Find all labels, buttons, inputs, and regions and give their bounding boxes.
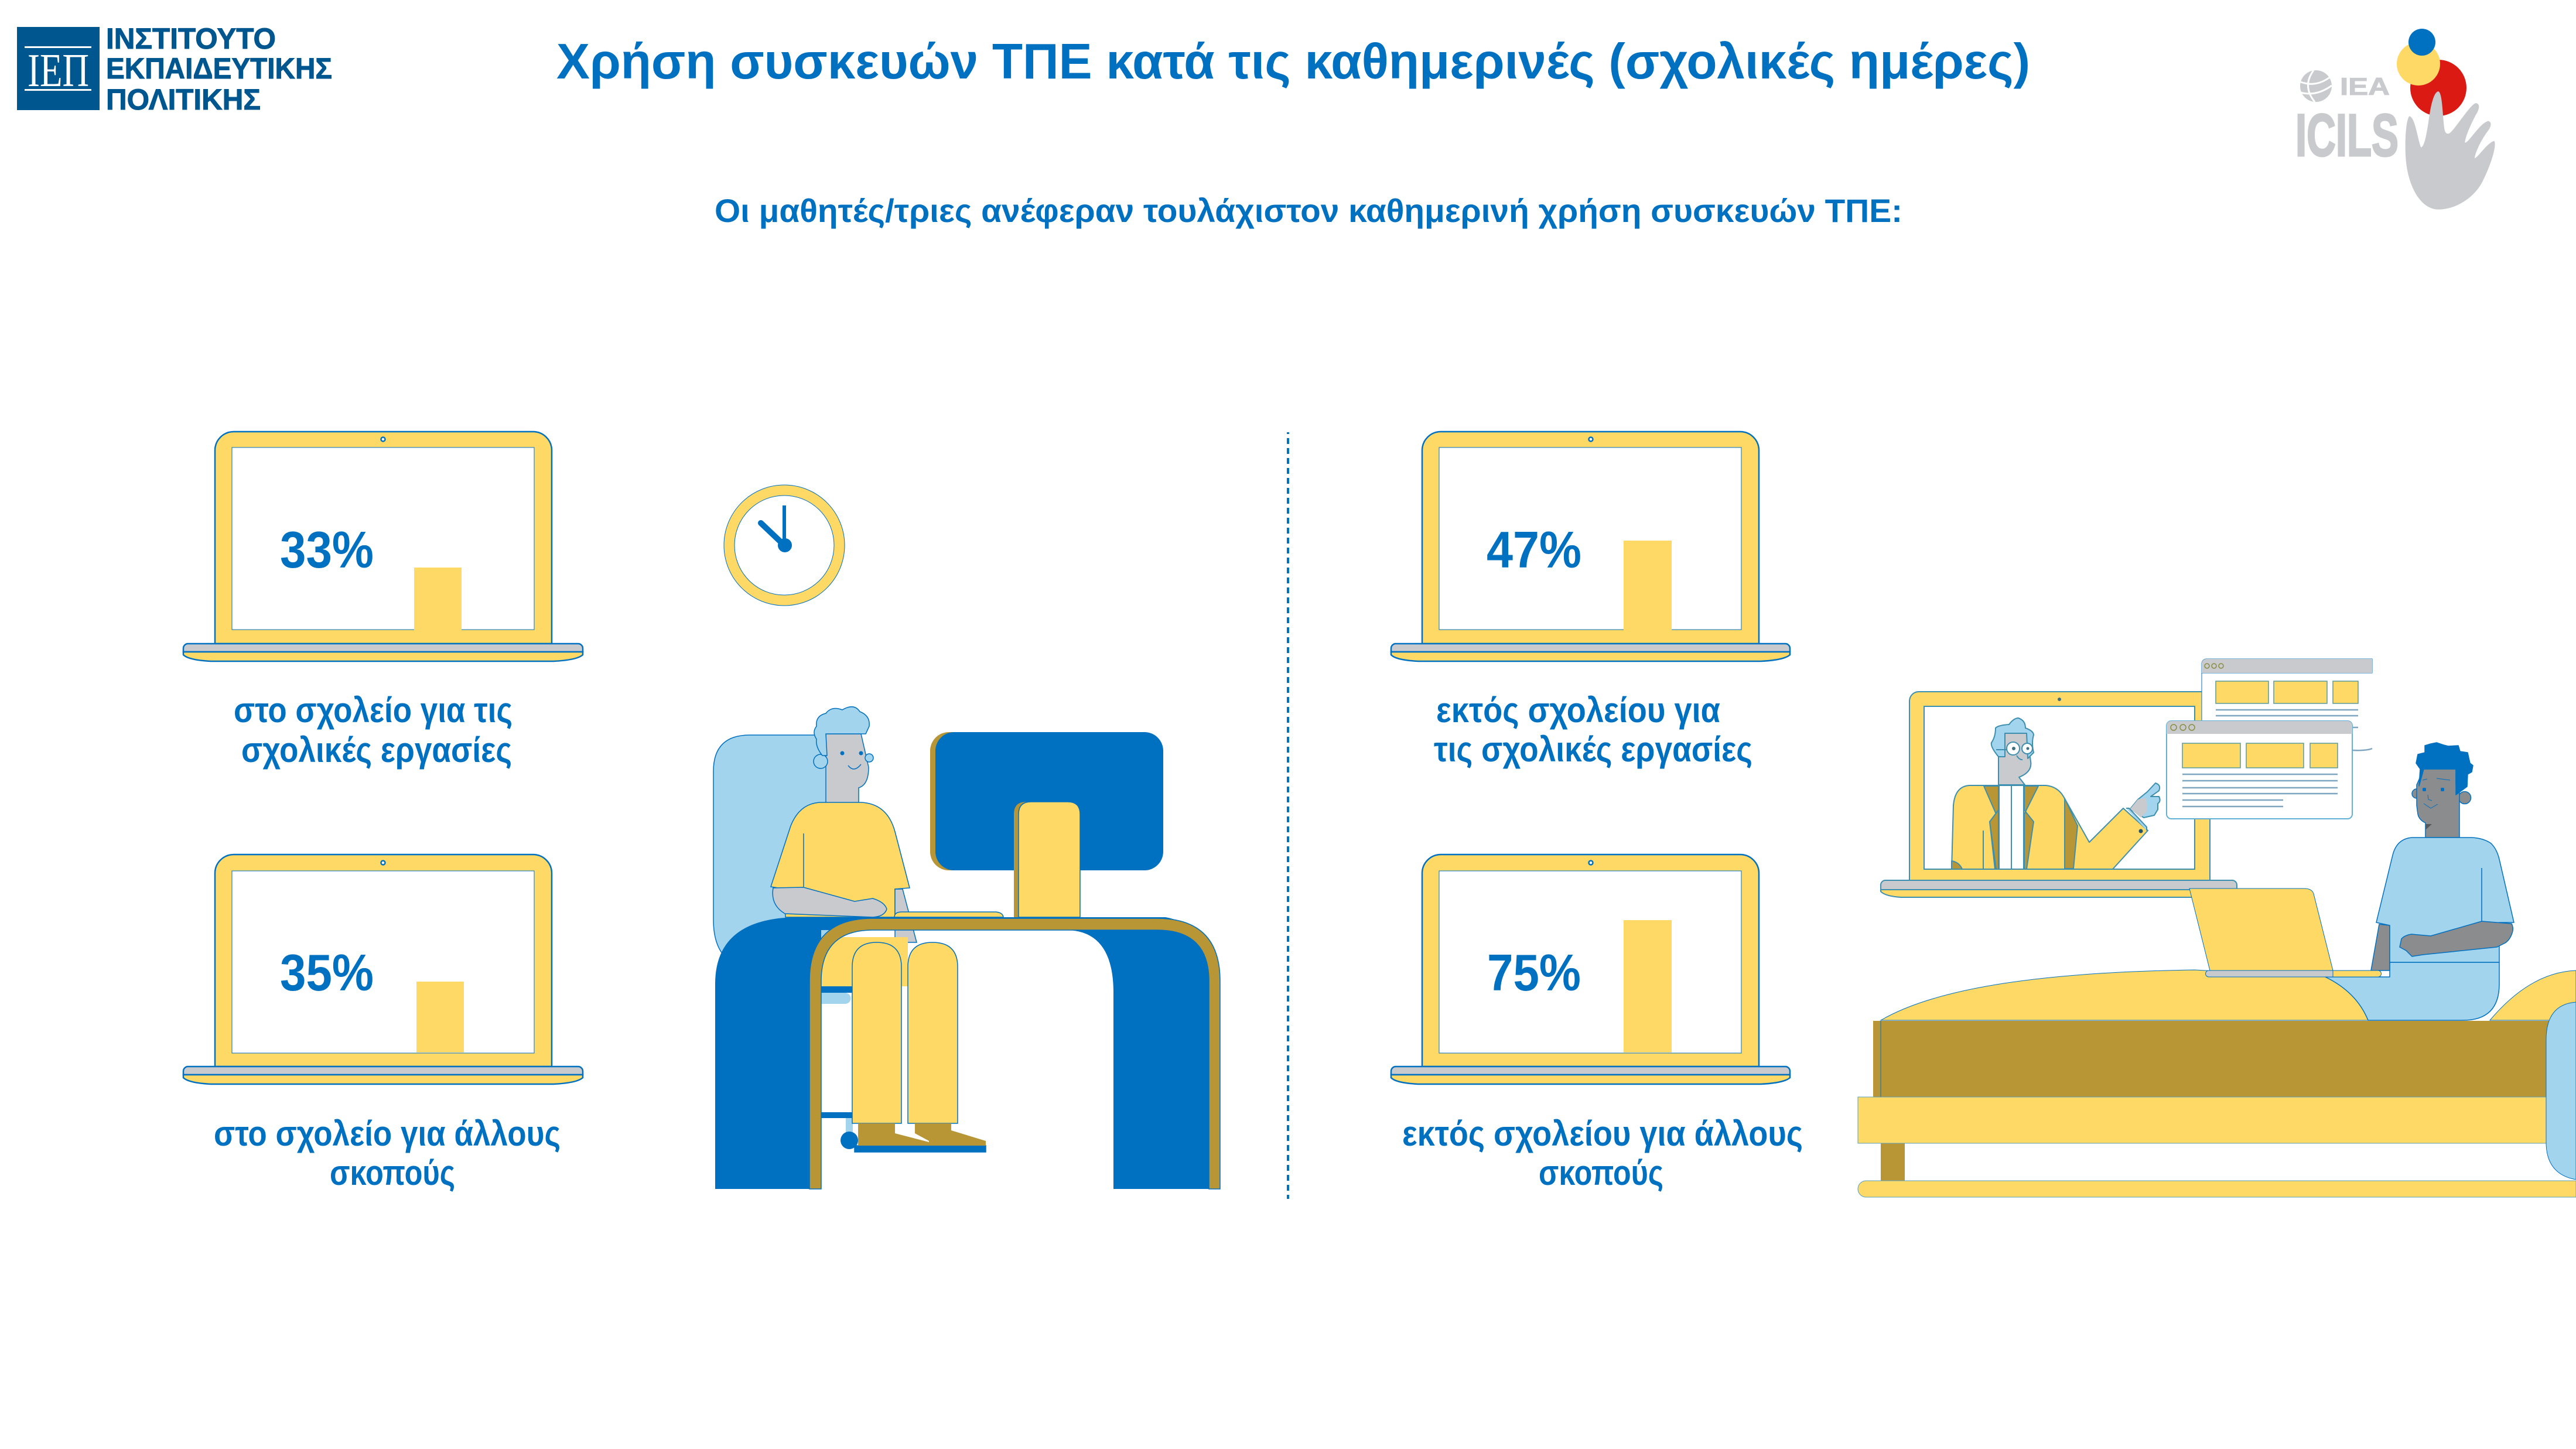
value: 35% <box>280 944 374 1002</box>
title: Χρήση συσκευών ΤΠΕ κατά τις καθημερινές (σχολικές ημέρες) <box>556 34 2030 90</box>
ICILS text: ICILS <box>2295 102 2399 169</box>
caption: εκτός σχολείου για <box>1436 691 1720 730</box>
student's laptop <box>2189 888 2382 977</box>
front browser window <box>2167 721 2352 819</box>
laptop chart <box>183 432 583 661</box>
logo wordmark: ΙΝΣΤΙΤΟΥΤΟ <box>106 22 276 55</box>
legs and shoes <box>852 942 986 1152</box>
caption: εκτός σχολείου για άλλους <box>1402 1114 1803 1153</box>
monitor <box>930 732 1163 917</box>
laptop chart <box>1391 855 1790 1084</box>
teacher <box>1952 718 2160 869</box>
value: 47% <box>1487 521 1581 579</box>
pillow <box>2546 1002 2576 1180</box>
panel: at school, other purposes 35% <box>183 855 583 1192</box>
person upper body <box>771 707 1003 942</box>
value: 33% <box>280 521 374 579</box>
laptop <box>1881 692 2237 897</box>
laptop chart <box>183 855 583 1084</box>
student <box>2325 743 2514 1020</box>
logo wordmark: ΠΟΛΙΤΙΚΗΣ <box>106 83 261 116</box>
logo: Institute of Educational Policy <box>17 22 332 116</box>
divider <box>1287 432 1289 1199</box>
back browser window <box>2202 659 2372 752</box>
logo wordmark <box>106 22 332 116</box>
caption: στο σχολείο για τις <box>234 691 513 730</box>
desk blue body <box>715 917 1210 1189</box>
desk gold top <box>809 918 1220 1189</box>
IEA text: IEA <box>2340 73 2390 100</box>
logo mark <box>17 27 100 110</box>
blanket <box>1881 970 2368 1020</box>
value: 75% <box>1487 944 1581 1002</box>
laptop chart <box>1391 432 1790 661</box>
blanket right <box>2490 970 2576 1020</box>
bed frame <box>1858 1021 2576 1197</box>
caption: σκοπούς <box>330 1153 455 1192</box>
icon: globe <box>2300 70 2332 102</box>
icon: clock <box>724 485 845 606</box>
caption <box>1434 691 1752 769</box>
caption <box>1402 1114 1803 1192</box>
panel: outside school, school tasks 47% <box>1391 432 1790 769</box>
chair <box>713 735 858 1149</box>
logo wordmark: ΕΚΠΑΙΔΕΥΤΙΚΗΣ <box>106 52 332 85</box>
caption: τις σχολικές εργασίες <box>1434 730 1752 769</box>
caption: σκοπούς <box>1539 1153 1663 1192</box>
panel: outside school, other purposes 75% <box>1391 855 1803 1192</box>
icon: circles and hand <box>2397 29 2495 210</box>
subtitle: Οι μαθητές/τριες ανέφεραν τουλάχιστον καθημερινή χρήση συσκευών ΤΠΕ: <box>715 192 1902 229</box>
lap <box>821 937 908 986</box>
logo mark: ΙΕΠ <box>28 45 89 97</box>
caption: σχολικές εργασίες <box>241 730 512 770</box>
caption <box>234 691 513 770</box>
caption: στο σχολείο για άλλους <box>214 1114 561 1153</box>
illustration: student at desk <box>713 707 1220 1189</box>
ICILS logo <box>2295 29 2495 210</box>
illustration: online lesson on laptop <box>1881 659 2372 897</box>
illustration: student on bed with laptop <box>1858 743 2576 1197</box>
caption <box>214 1114 561 1192</box>
panel: at school, school tasks 33% <box>183 432 583 770</box>
